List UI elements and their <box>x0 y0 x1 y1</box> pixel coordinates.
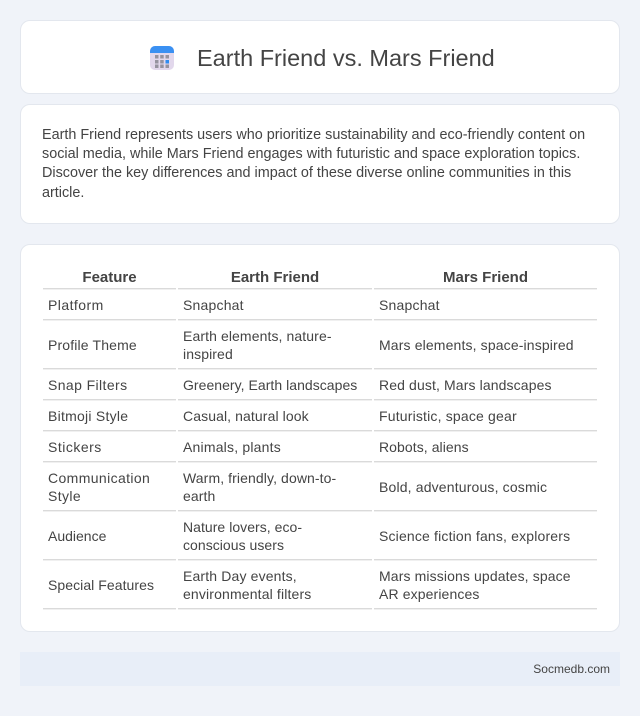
header: mars friend: Mars Friend <box>443 269 528 286</box>
comparison table: Audience <box>48 528 106 544</box>
icon: calendar <box>150 46 174 70</box>
table card <box>20 244 620 632</box>
title: Earth Friend vs. Mars Friend <box>197 45 495 71</box>
comparison table: Mars elements, space-inspired <box>379 337 574 353</box>
intro text: Discover the key differences and impact of these diverse online communities in this <box>42 165 571 181</box>
comparison table: Special Features <box>48 577 154 593</box>
comparison table: Science fiction fans, explorers <box>379 528 570 544</box>
header: feature: Feature <box>82 269 137 286</box>
comparison table: AR experiences <box>379 586 480 602</box>
comparison table: Animals, plants <box>183 439 281 455</box>
comparison table: environmental filters <box>183 586 311 602</box>
comparison table: Communication <box>48 470 150 486</box>
comparison table: Snapchat <box>379 297 440 313</box>
comparison table: Mars missions updates, space <box>379 568 571 584</box>
comparison table: Futuristic, space gear <box>379 408 517 424</box>
comparison table: Style <box>48 488 81 504</box>
comparison table: Warm, friendly, down-to- <box>183 470 336 486</box>
footer bar <box>20 652 620 686</box>
comparison table: Earth Day events, <box>183 568 297 584</box>
comparison table: Snapchat <box>183 297 244 313</box>
comparison table: Platform <box>48 297 104 313</box>
comparison table: Casual, natural look <box>183 408 309 424</box>
comparison table: conscious users <box>183 537 284 553</box>
comparison table: Snap Filters <box>48 377 128 393</box>
comparison table: Bold, adventurous, cosmic <box>379 479 547 495</box>
comparison table: Nature lovers, eco- <box>183 519 302 535</box>
comparison table: inspired <box>183 346 233 362</box>
intro card <box>20 104 620 224</box>
comparison table: Bitmoji Style <box>48 408 128 424</box>
comparison table: Greenery, Earth landscapes <box>183 377 357 393</box>
header: earth friend: Earth Friend <box>231 269 319 286</box>
comparison table: Stickers <box>48 439 102 455</box>
footer text: Socmedb.com <box>533 662 610 676</box>
title card <box>20 20 620 94</box>
intro text: article. <box>42 185 84 201</box>
comparison table: Profile Theme <box>48 337 137 353</box>
intro text <box>42 127 585 201</box>
comparison table: Red dust, Mars landscapes <box>379 377 552 393</box>
comparison table: earth <box>183 488 215 504</box>
intro text: social media, while Mars Friend engages with futuristic and space exploration topics. <box>42 146 580 162</box>
comparison table: Robots, aliens <box>379 439 469 455</box>
intro text: Earth Friend represents users who prioritize sustainability and eco-friendly content on <box>42 127 585 143</box>
comparison table: Earth elements, nature- <box>183 328 332 344</box>
